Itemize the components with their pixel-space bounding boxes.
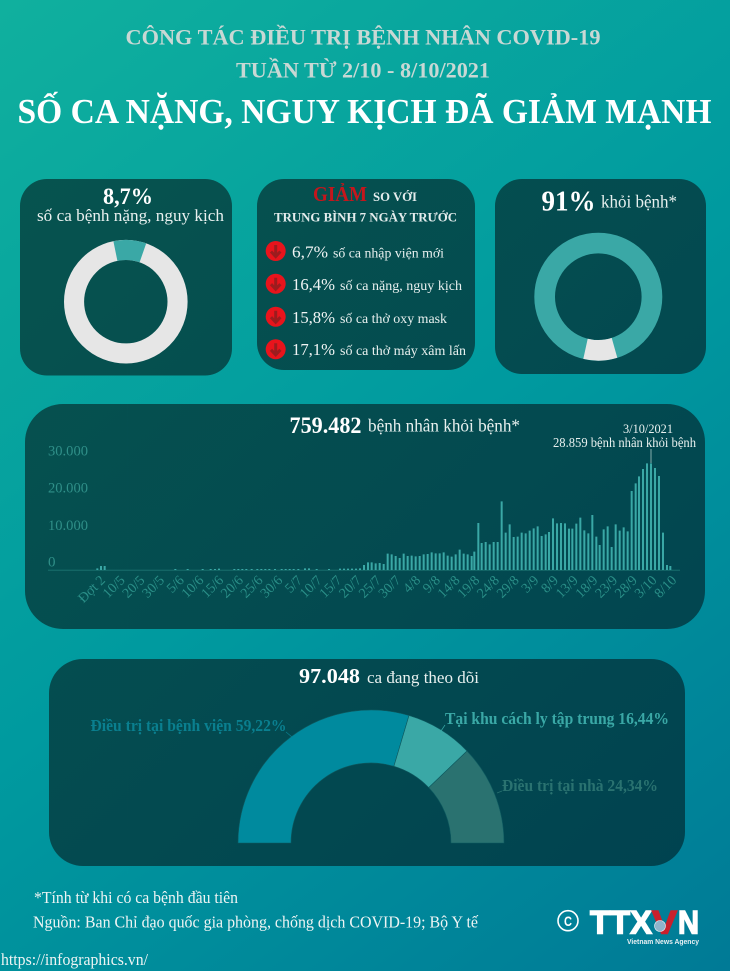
half donut chart (238, 710, 504, 843)
donut chart (545, 243, 652, 361)
x axis labels (76, 573, 680, 606)
x axis labels: 30/6 (258, 573, 286, 601)
value: 91%: 91% (542, 187, 596, 218)
heading: giảm: SO VỚI (373, 189, 417, 204)
x axis labels: 8/10 (652, 573, 680, 601)
bars: main period (372, 463, 670, 570)
caption: số ca bệnh nặng, nguy kịch (37, 206, 224, 225)
x axis labels: 19/8 (455, 573, 483, 601)
x axis labels: 28/9 (613, 573, 641, 601)
logo wordmark: N (678, 904, 699, 940)
icon: copyright (558, 911, 578, 931)
label: hospital: Điều trị tại bệnh viện 59,22% (90, 716, 286, 735)
x axis labels: 9/8 (420, 573, 444, 596)
donut chart (74, 240, 178, 353)
source: Nguồn: Ban Chỉ đạo quốc gia phòng, chống dịch COVID-19; Bộ Y tế (33, 913, 478, 932)
row: severe cases: số ca nặng, nguy kịch (340, 279, 462, 294)
website: https://infographics.vn/ (1, 950, 148, 969)
panel: cases under monitoring (49, 659, 685, 866)
x axis labels: Đợt 2 (76, 573, 109, 606)
label: quarantine: Tại khu cách ly tập trung 16,44% (445, 709, 669, 728)
y axis labels: 20.000 (48, 480, 88, 496)
logo tagline: Vietnam News Agency (627, 937, 700, 946)
panel heading: ca đang theo dõi (367, 668, 479, 687)
x axis labels: 30/5 (140, 573, 168, 601)
heading: giảm: GIẢM (313, 182, 367, 206)
x axis labels: 15/6 (199, 573, 227, 601)
chart heading: 759.482 (290, 413, 362, 438)
panel background (257, 179, 475, 370)
panel: recovered donut (495, 179, 706, 374)
peak annotation: 3/10/2021 (623, 421, 673, 436)
panel background (495, 179, 706, 374)
panel heading: 97.048 (299, 664, 360, 688)
x axis labels: 18/9 (573, 573, 601, 601)
x axis labels: 29/8 (494, 573, 523, 601)
row: oxygen mask: 15,8% (292, 308, 335, 327)
x axis labels: 10/5 (100, 573, 129, 601)
x axis labels: 8/9 (539, 573, 562, 596)
x axis labels: 4/8 (401, 573, 424, 596)
y axis labels: 30.000 (48, 444, 88, 460)
bars: early period (97, 562, 368, 570)
x axis labels: 30/7 (376, 573, 404, 601)
panel background (25, 404, 705, 629)
x axis labels: 3/9 (519, 573, 542, 596)
row: oxygen mask (266, 307, 447, 327)
chart heading (290, 413, 520, 438)
panel background (49, 659, 685, 866)
title line 1: CÔNG TÁC ĐIỀU TRỊ BỆNH NHÂN COVID-19 (126, 24, 600, 50)
panel: recovered bar chart (25, 404, 705, 629)
logo wordmark: TTX (590, 904, 653, 940)
panel: decrease compared with 7 days (257, 179, 475, 370)
row: invasive ventilation: số ca thở máy xâm lấn (340, 344, 466, 359)
x axis labels: 5/7 (283, 573, 306, 596)
y axis labels: 10.000 (48, 518, 88, 534)
panel: severe cases donut (20, 179, 232, 376)
chart heading: bệnh nhân khỏi bệnh* (368, 416, 520, 436)
x axis labels: 23/9 (593, 573, 621, 601)
row: invasive ventilation: 17,1% (292, 340, 335, 359)
peak annotation (553, 421, 696, 463)
main heading: SỐ CA NẶNG, NGUY KỊCH ĐÃ GIẢM MẠNH (18, 90, 712, 131)
label: home: Điều trị tại nhà 24,34% (502, 776, 658, 795)
row: hospital admissions: số ca nhập viện mới (333, 247, 444, 262)
logo wordmark: V (652, 904, 678, 940)
y axis labels (48, 444, 88, 570)
x axis labels: 10/6 (179, 573, 207, 601)
title block (18, 24, 712, 131)
heading: giảm: TRUNG BÌNH 7 NGÀY TRƯỚC (274, 210, 457, 224)
row: hospital admissions (266, 241, 444, 262)
row: severe cases (266, 274, 462, 294)
row: invasive ventilation (266, 339, 466, 359)
x axis labels: 20/7 (337, 573, 365, 601)
heading: giảm (274, 182, 457, 224)
x axis labels: 24/8 (475, 573, 503, 601)
footnote: *Tính từ khi có ca bệnh đầu tiên (34, 888, 238, 907)
logo: TTXVN (558, 904, 700, 946)
x axis labels: 20/6 (219, 573, 247, 601)
icon: globe (654, 920, 666, 932)
x axis labels: 20/5 (120, 573, 148, 601)
row: severe cases: 16,4% (292, 275, 335, 294)
x axis labels: 10/7 (297, 573, 326, 601)
x axis labels: 15/7 (317, 573, 345, 601)
y axis labels: 0 (48, 554, 56, 570)
panel heading (299, 664, 479, 688)
peak annotation: 28.859 bệnh nhân khỏi bệnh (553, 435, 696, 450)
row: hospital admissions: 6,7% (292, 243, 328, 262)
title line 2: TUẦN TỪ 2/10 - 8/10/2021 (236, 58, 490, 82)
caption: khỏi bệnh* (601, 192, 677, 212)
panel background (20, 179, 232, 376)
x axis labels: 3/10 (632, 573, 660, 601)
icon: copyright: C (564, 913, 572, 929)
x axis labels: 13/9 (553, 573, 582, 601)
row: oxygen mask: số ca thở oxy mask (340, 312, 447, 327)
x axis labels: 5/6 (164, 573, 188, 596)
x axis labels: 25/6 (238, 573, 266, 601)
x axis labels: 25/7 (356, 573, 385, 601)
logo wordmark (590, 904, 699, 940)
axis line (48, 569, 680, 571)
value: 8,7%: 8,7% (103, 184, 153, 209)
x axis labels: 14/8 (435, 573, 463, 601)
